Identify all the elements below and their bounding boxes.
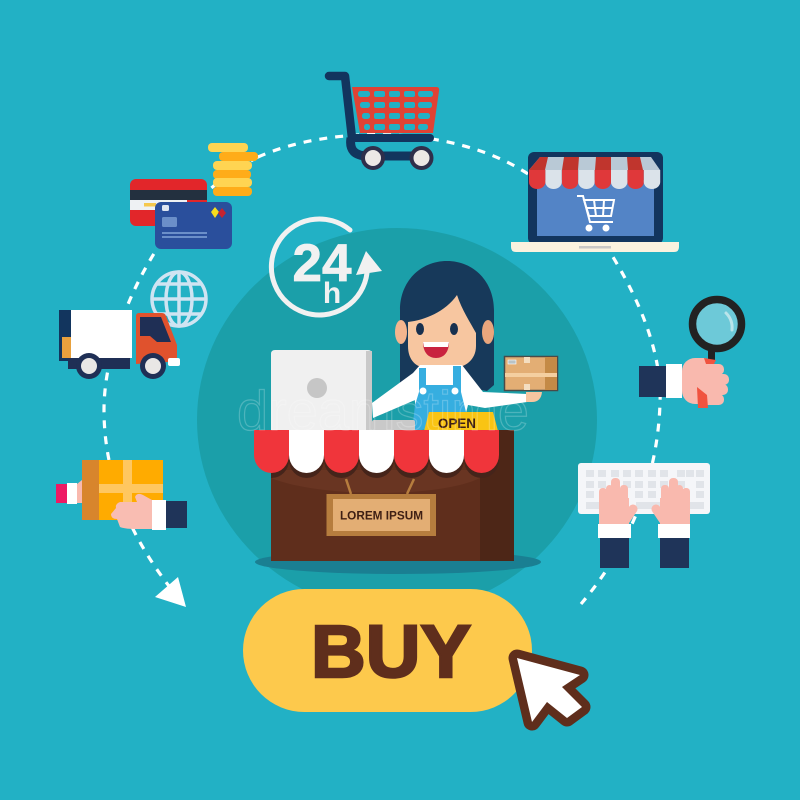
dashed process ring [104, 135, 660, 604]
hanging sign: LOREM IPSUM [340, 508, 423, 522]
icon: 24 hours clock: 24 [293, 234, 352, 293]
icon: 24 hours clock [271, 219, 382, 315]
arrow head [155, 577, 186, 607]
icon: delivery truck [59, 310, 180, 379]
watermark: dreamstime [237, 379, 529, 442]
left hand [599, 478, 633, 524]
open sign: OPEN [438, 415, 476, 431]
awning shadow [271, 456, 499, 478]
red and white awning [254, 430, 499, 473]
icon: 24 hours clock: h [323, 277, 341, 310]
hanging sign [326, 479, 436, 536]
icon: small white cart [577, 196, 614, 230]
character: shop keeper [372, 261, 542, 432]
icon: shopping cart [329, 76, 439, 170]
open sign [424, 412, 498, 431]
central circle backdrop [197, 228, 597, 612]
buy button: BUY [311, 610, 471, 693]
icon: hand with magnifying glass [639, 300, 742, 408]
desk shadow [255, 550, 541, 574]
icon: laptop storefront [511, 152, 679, 252]
shop counter [254, 430, 514, 561]
laptop on counter [271, 350, 415, 431]
icon: credit cards [130, 179, 232, 249]
icon: hands on keyboard [578, 463, 710, 568]
icon: coins [208, 143, 258, 196]
icon: mouse cursor [517, 658, 582, 722]
icon: hands with parcel [56, 460, 187, 530]
icon: globe [152, 272, 206, 326]
buy button [243, 589, 532, 712]
right hand [656, 478, 690, 524]
parcel held by character [504, 356, 558, 390]
